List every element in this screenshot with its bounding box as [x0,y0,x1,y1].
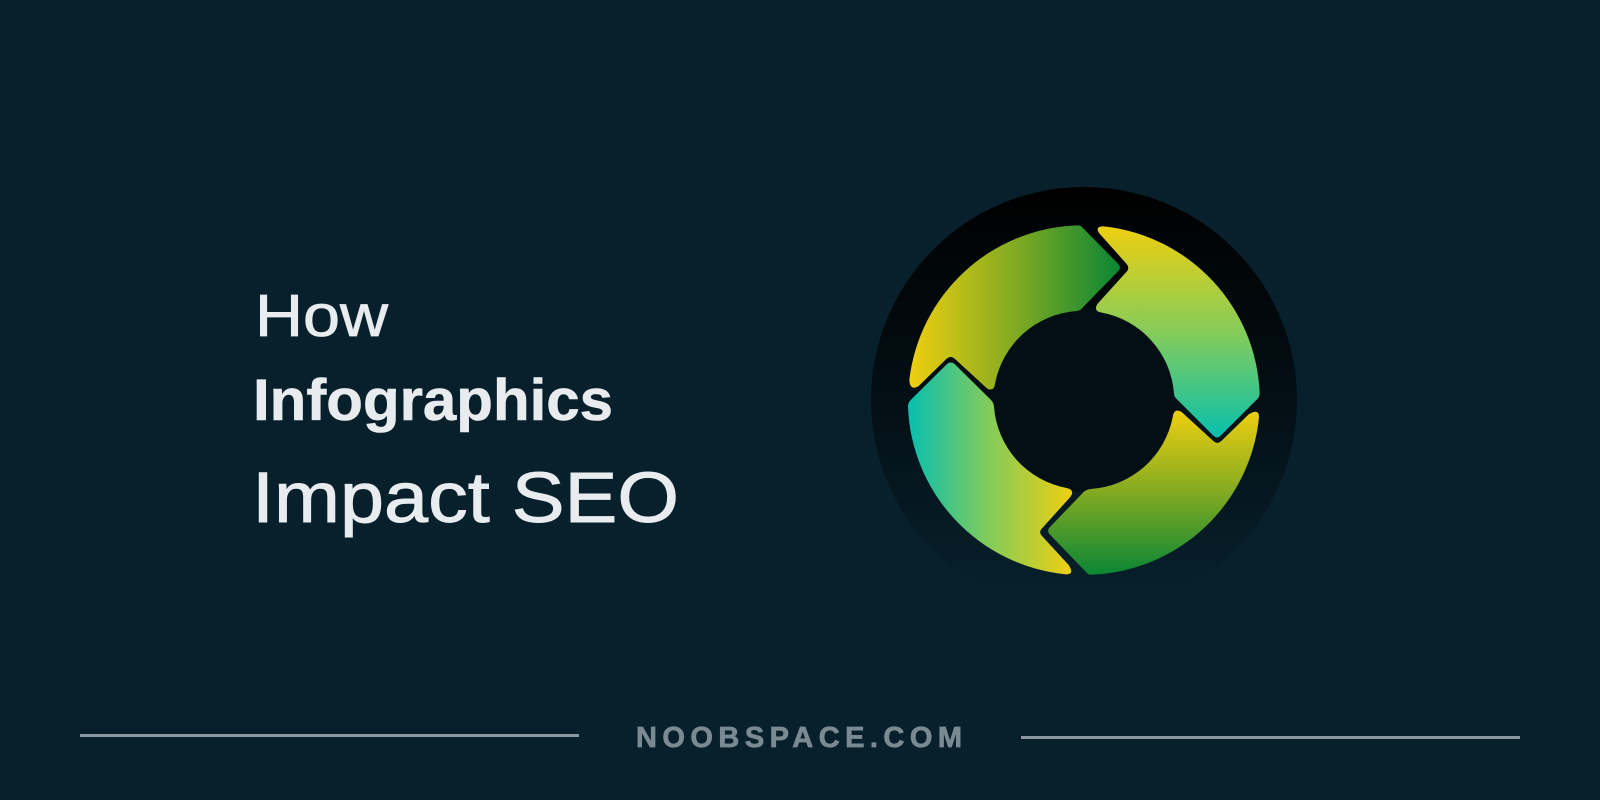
cycle diagram [871,187,1297,613]
right divider line [1021,736,1520,739]
website label: NOOBSPACE.COM [636,722,962,754]
title line: Impact SEO: Impact SEO [252,459,679,538]
arrow: top left [909,225,1120,390]
arrow: bottom right [1048,411,1259,575]
arrow: top right [1096,226,1260,437]
left divider line [80,734,579,737]
arrow: bottom left [908,362,1072,574]
title line: Infographics: Infographics [253,368,613,433]
footer [80,722,1520,754]
backing disc [871,187,1297,613]
title [252,283,679,538]
center circle [992,308,1176,492]
cycle arrows [908,225,1260,575]
title line: How: How [255,283,388,349]
